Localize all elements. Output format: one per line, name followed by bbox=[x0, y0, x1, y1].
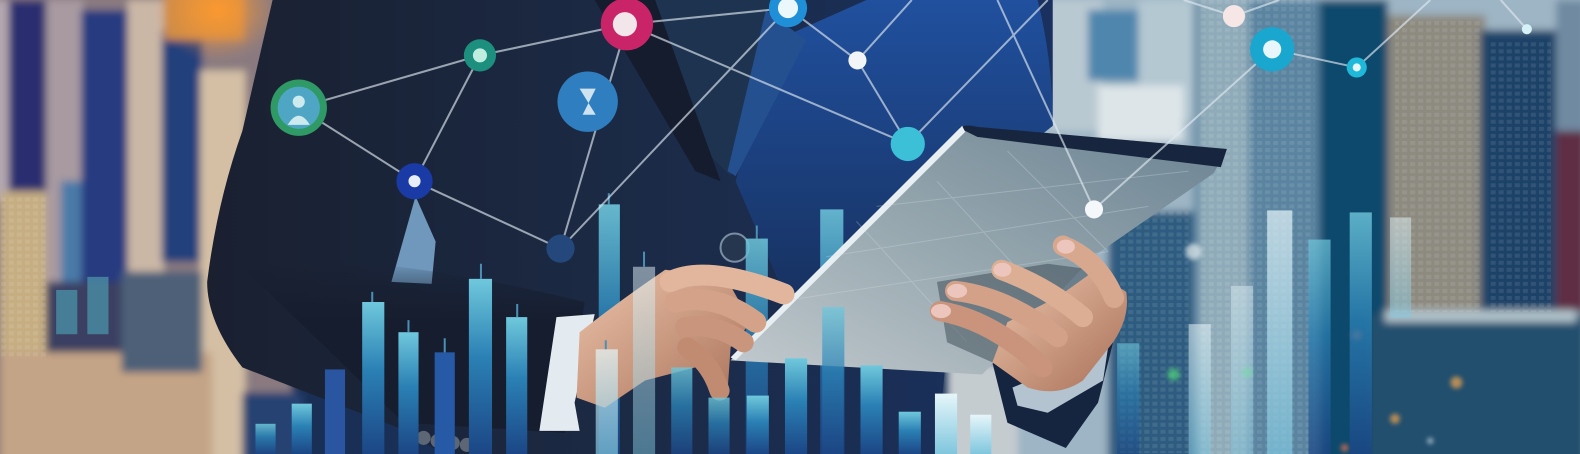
right sleeve bbox=[992, 342, 1113, 448]
shirt and tie bbox=[655, 0, 776, 176]
jacket right panel bbox=[736, 0, 1053, 322]
node: green user bbox=[271, 80, 327, 136]
node: cyan ring bbox=[1250, 27, 1294, 71]
network graph lines bbox=[299, 0, 1527, 249]
node: blue hourglass bbox=[557, 71, 618, 132]
fingers bbox=[940, 246, 1114, 367]
fingers bbox=[670, 275, 784, 391]
background: blurred city right bbox=[947, 0, 1580, 454]
finger shadow on tablet bbox=[937, 264, 1108, 362]
node: top cyan bbox=[769, 0, 807, 27]
palm bbox=[577, 270, 751, 408]
tablet bbox=[731, 126, 1227, 374]
background: blurred city left bbox=[0, 0, 303, 454]
sleeve shade bbox=[247, 262, 585, 433]
palm bbox=[992, 272, 1127, 391]
left shirt cuff bbox=[539, 314, 595, 431]
bar chart: front bbox=[56, 193, 1411, 454]
hand: right holding tablet bbox=[931, 240, 1127, 391]
node: magenta bbox=[601, 0, 653, 50]
node: dark blue bbox=[396, 163, 433, 199]
node: top light bbox=[1223, 5, 1245, 27]
bokeh lights bbox=[1167, 244, 1462, 452]
bar chart: behind tablet bbox=[599, 204, 843, 454]
tablet grid bbox=[776, 151, 1189, 342]
hand: left pointing bbox=[577, 270, 784, 408]
node: cyan centre bbox=[891, 127, 925, 161]
tablet highlight edge bbox=[731, 126, 965, 360]
network nodes bbox=[271, 0, 1532, 263]
jacket body and sleeve bbox=[207, 0, 1053, 454]
node: white bbox=[848, 51, 867, 69]
candlestick wicks bbox=[372, 193, 757, 352]
right shirt cuff bbox=[1012, 347, 1108, 413]
node: small green bbox=[464, 39, 496, 71]
right lapel bbox=[728, 10, 806, 176]
tablet dark top edge bbox=[959, 126, 1227, 167]
sleeve buttons bbox=[401, 426, 474, 452]
suit jacket bbox=[207, 0, 1053, 454]
white shirt gap bbox=[391, 196, 436, 284]
button bbox=[721, 234, 749, 262]
node: tablet white bbox=[1085, 200, 1103, 218]
node: small cyan bbox=[1347, 57, 1367, 78]
node: faded lower bbox=[546, 235, 575, 263]
left lapel bbox=[595, 0, 721, 181]
tablet screen bbox=[731, 126, 1227, 374]
fingernails bbox=[931, 240, 1075, 318]
node: far right bbox=[1522, 24, 1532, 34]
